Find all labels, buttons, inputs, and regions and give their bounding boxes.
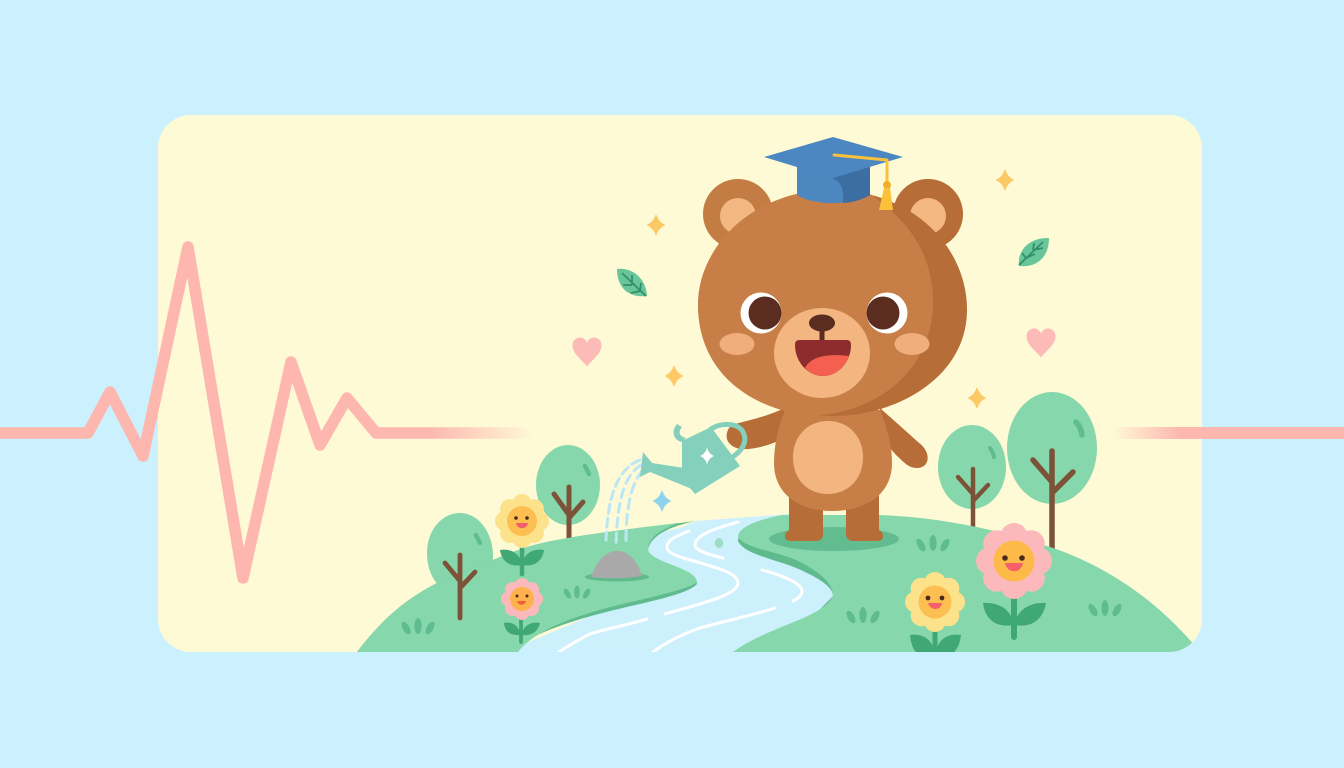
- leaf: right: [1019, 238, 1049, 266]
- tree: back left foliage: [427, 513, 493, 583]
- illustration: [0, 115, 1344, 652]
- blue sparkle: [652, 490, 672, 512]
- tree: front left highlight: [476, 535, 480, 543]
- grass tufts: [400, 535, 1123, 636]
- cap top: [764, 137, 903, 178]
- bear torso: [774, 410, 892, 511]
- bear ear: right: [893, 179, 963, 249]
- can handle ring: [711, 424, 745, 456]
- rock: [585, 551, 649, 582]
- graduation cap: [764, 137, 903, 210]
- can sparkle: [700, 447, 714, 465]
- can spout: [640, 452, 692, 489]
- leaf: left: [617, 269, 647, 296]
- tree: middle foliage: [536, 445, 600, 540]
- garden scene: [357, 392, 1200, 655]
- panel: cream card: [158, 115, 1202, 652]
- bear eyes: [740, 292, 908, 334]
- cap tassel: [834, 155, 893, 210]
- cap base: [797, 163, 870, 203]
- watering can: [640, 424, 745, 494]
- can top handle: [674, 424, 686, 442]
- flower: pink large right: [976, 523, 1052, 637]
- flower: yellow lower right: [905, 572, 965, 655]
- bear: [698, 137, 967, 551]
- water stream: [606, 460, 643, 548]
- river pebble: [715, 538, 723, 548]
- hill: right: [733, 515, 1200, 652]
- heartbeat line: right: [1112, 427, 1344, 439]
- tree: front left trunk: [445, 555, 475, 618]
- tree: small right: [938, 425, 1006, 530]
- flower: yellow upper left: [495, 494, 549, 574]
- bear nose: [809, 314, 835, 341]
- bear muzzle: [774, 308, 870, 398]
- hill: right bank edge: [738, 515, 833, 610]
- flower: pink lower left: [501, 578, 543, 642]
- bear arm: left: [727, 408, 785, 449]
- bear head: [698, 190, 967, 416]
- hill: left bank edge: [357, 521, 697, 652]
- bear belly: [793, 421, 863, 494]
- river streaks: [559, 522, 802, 652]
- bear shadow: [769, 527, 899, 551]
- bear legs: [785, 495, 883, 541]
- bear ear: left: [703, 179, 773, 249]
- heartbeat line: left: [0, 247, 535, 578]
- hill: left: [357, 523, 697, 652]
- decorations: [572, 169, 1056, 512]
- can body: [682, 427, 740, 494]
- gold sparkles: [646, 169, 1014, 409]
- bear mouth: [795, 340, 851, 376]
- tree: large right: [1007, 392, 1097, 552]
- river: [505, 514, 850, 652]
- bear arm: right: [878, 408, 928, 468]
- hearts: [572, 328, 1056, 366]
- bear cheeks: [720, 333, 930, 355]
